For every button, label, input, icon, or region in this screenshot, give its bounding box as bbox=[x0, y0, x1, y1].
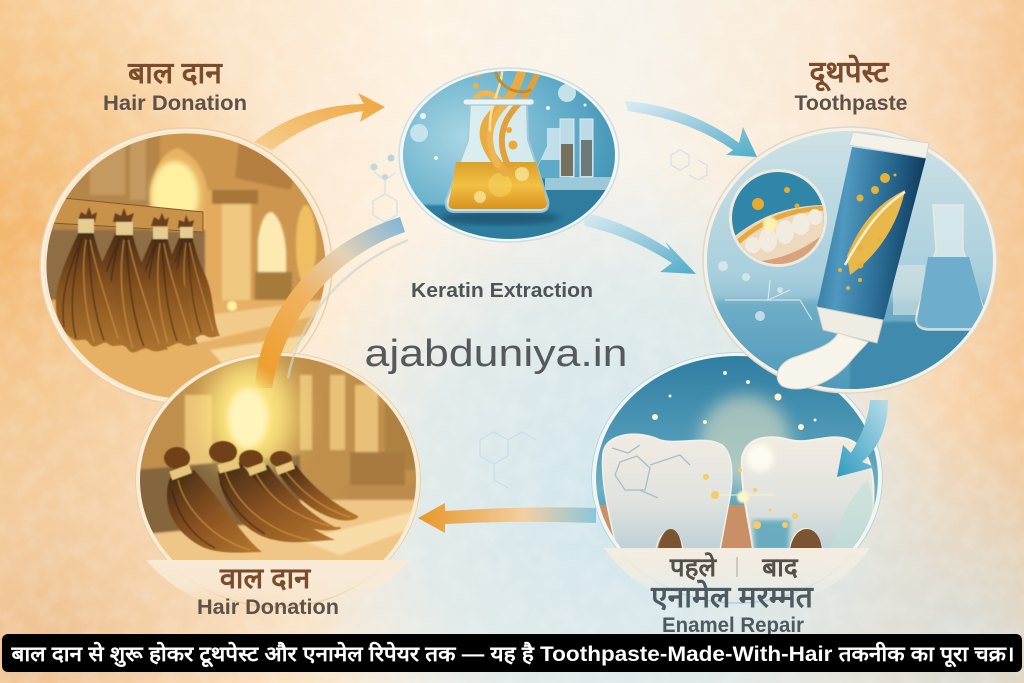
panel: keratin extraction flask bbox=[398, 62, 620, 245]
molecule pattern bbox=[370, 150, 707, 488]
arrow: enamel to bottom hair circle bbox=[418, 503, 596, 533]
cracked tooth bbox=[602, 434, 732, 550]
heading: enamel repair: Enamel Repair bbox=[662, 614, 804, 637]
before after labels: पहले bbox=[669, 552, 717, 582]
caption fade bbox=[146, 560, 410, 605]
before after labels: बाद bbox=[761, 552, 799, 582]
arrow: hair to keratin bbox=[254, 93, 385, 150]
heading: toothpaste bbox=[794, 54, 908, 115]
heading: hair donation: Hair Donation bbox=[103, 92, 247, 115]
inset gum close-up bbox=[729, 169, 827, 270]
lab flask bbox=[893, 205, 985, 330]
heading: toothpaste: Toothpaste bbox=[794, 91, 908, 115]
panel: toothpaste bbox=[700, 125, 1000, 395]
panel: hair donation top bbox=[40, 125, 340, 410]
flask rim bbox=[463, 99, 534, 105]
heading: enamel repair: एनामेल मरम्मत bbox=[650, 579, 815, 614]
wooden beam bbox=[52, 198, 203, 232]
caption bar bbox=[2, 634, 1022, 672]
heading: hair donation: बाल दान bbox=[127, 57, 223, 90]
heading: toothpaste: दूथपेस्ट bbox=[809, 54, 890, 92]
before after labels bbox=[669, 552, 799, 582]
arrow: toothpaste to enamel bbox=[837, 400, 888, 477]
hair bundles bbox=[56, 207, 220, 353]
panel: hair donation bottom bbox=[135, 350, 425, 607]
arrow: keratin to toothpaste bbox=[625, 101, 757, 157]
heading: hair donation bottom: वाल दान bbox=[219, 563, 311, 595]
small flask and tubes bbox=[534, 119, 593, 178]
watermark: ajabduniya.in bbox=[364, 333, 628, 375]
repaired tooth bbox=[742, 437, 875, 550]
lying hair bundles bbox=[164, 441, 358, 553]
paste squeeze bbox=[777, 333, 868, 389]
heading: hair donation bottom bbox=[197, 563, 339, 619]
sparkles bbox=[703, 468, 798, 529]
heading: hair donation bottom: Hair Donation bbox=[197, 596, 339, 619]
label: keratin extraction: Keratin Extraction bbox=[411, 279, 593, 302]
caption panel bbox=[604, 548, 870, 603]
caption bar: बाल दान से शुरू होकर टूथपेस्ट और एनामेल रिपेयर तक — यह है Toothpaste-Made-With-Hair तकनीक का पूरा चक्र। bbox=[10, 641, 1014, 668]
golden hair swirl bbox=[476, 62, 540, 172]
heading: hair donation bbox=[103, 57, 247, 115]
toothpaste tube bbox=[777, 132, 929, 389]
heading: enamel repair bbox=[650, 579, 815, 637]
arrow: long arc from bottom hair circle to flask bbox=[255, 217, 408, 388]
temple interior bbox=[46, 134, 326, 398]
arrow: long arc from flask to toothpaste bbox=[582, 212, 696, 274]
panel: enamel repair bbox=[590, 350, 885, 603]
glass flask bbox=[446, 104, 548, 212]
